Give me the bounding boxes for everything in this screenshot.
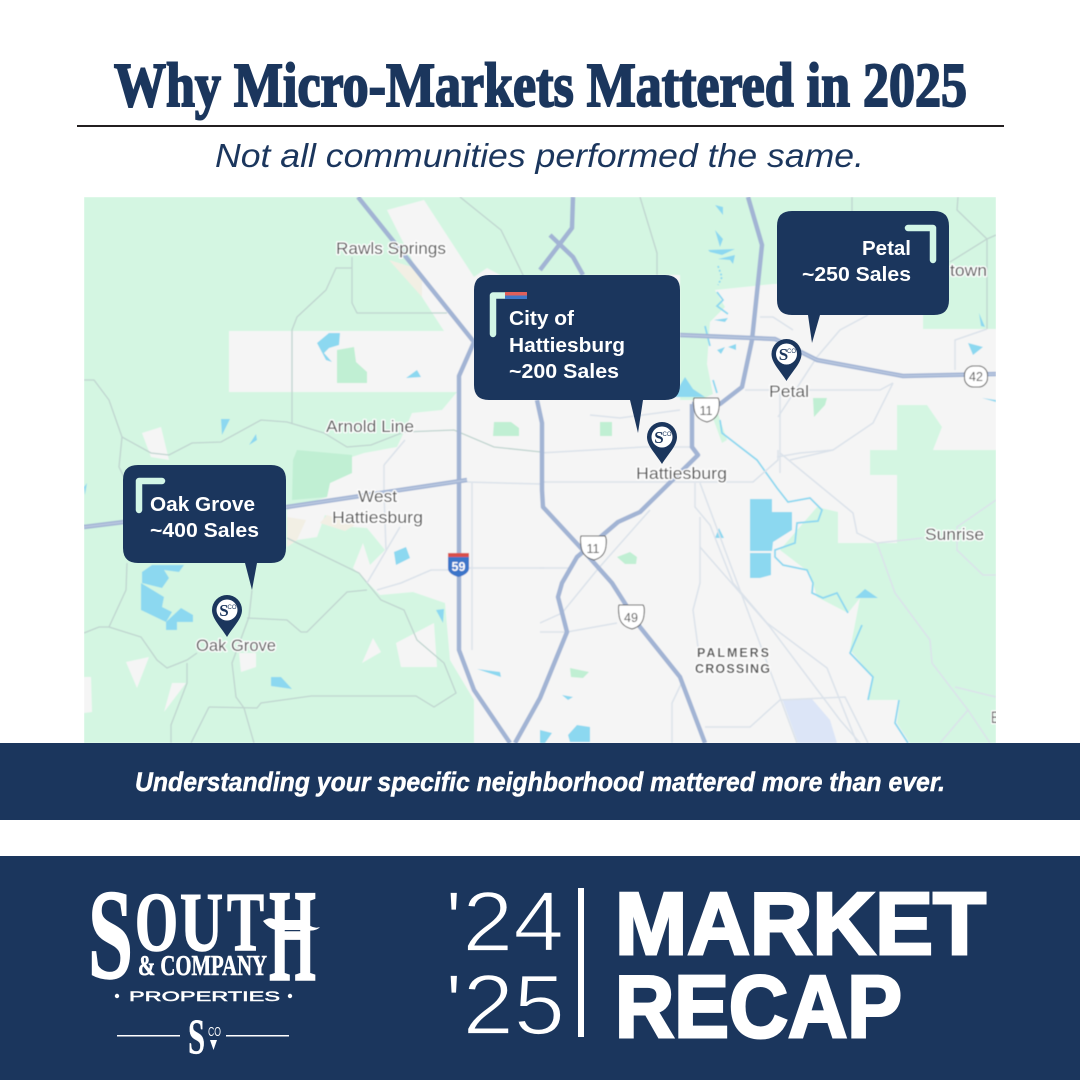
map lake	[782, 699, 837, 743]
map place labels: Oak Grove	[196, 637, 276, 655]
map land: beige and dark green patches	[287, 260, 827, 678]
map place labels: Petal	[769, 383, 809, 401]
map minor roads on developed land	[367, 315, 996, 743]
icon: Oak Grove map pin: S	[219, 601, 229, 620]
icon: Petal map pin: CO	[787, 349, 796, 355]
shield: interstate 59	[448, 553, 469, 577]
years: '24	[445, 875, 564, 970]
map place labels: Rawls Springs	[336, 240, 446, 258]
callout: City of Hattiesburg: ~200 Sales	[509, 361, 619, 383]
shield: US 11 north: 11	[700, 404, 713, 418]
footer: H	[269, 862, 316, 1009]
market recap wordmark: MARKET	[615, 874, 986, 973]
map highway centre lines	[84, 335, 996, 527]
icon: Oak Grove map pin: CO	[228, 605, 237, 611]
highway shields	[448, 366, 988, 629]
map highways	[84, 197, 996, 743]
icon: Hattiesburg map pin: S	[654, 428, 664, 447]
logo: South and Company Properties: PROPERTIES	[129, 988, 280, 1004]
shield: US 49: 49	[624, 611, 638, 625]
years: '25	[445, 958, 565, 1053]
logo: South and Company Properties: S	[88, 864, 133, 1006]
callout: Petal: Petal	[862, 238, 911, 260]
panel: map	[84, 197, 999, 743]
map place labels: PALMERS	[697, 646, 769, 660]
map place labels: Hattiesburg	[636, 465, 727, 483]
market recap wordmark	[615, 874, 986, 1056]
icon: Petal map pin	[772, 339, 802, 381]
callout: City of Hattiesburg	[474, 275, 680, 433]
subtitle: Not all communities performed the same.	[215, 137, 864, 174]
callout: City of Hattiesburg: Hattiesburg	[509, 335, 625, 357]
shield: US 11 north	[694, 398, 719, 422]
shield: interstate 59: 59	[452, 560, 465, 574]
shield: state 42	[964, 366, 988, 387]
icon: Hattiesburg map pin	[647, 422, 677, 464]
callout: Oak Grove: Oak Grove	[150, 494, 255, 516]
map place labels: Hattiesburg	[332, 509, 423, 527]
years	[445, 875, 565, 1053]
icon: Petal map pin: S	[779, 345, 788, 364]
icon: Oak Grove map pin	[212, 595, 242, 637]
callout: Oak Grove	[123, 465, 286, 590]
logo: South and Company Properties: U	[180, 876, 223, 969]
logo: South and Company Properties: & COMPANY	[138, 951, 267, 982]
map minor roads	[84, 197, 996, 743]
logo: South and Company Properties: CO	[208, 1024, 221, 1039]
banner: Understanding your specific neighborhood mattered more than ever.	[135, 767, 945, 797]
map rivers	[705, 266, 908, 743]
icon: Hattiesburg map pin: CO	[662, 432, 672, 438]
logo: South and Company Properties: O	[135, 876, 178, 969]
callout: Petal: ~250 Sales	[802, 264, 911, 286]
map land: green strip by river	[680, 270, 727, 443]
banner	[0, 743, 1080, 820]
callout: Petal	[777, 211, 949, 343]
shield: US 11 south	[580, 536, 606, 560]
market recap wordmark: RECAP	[615, 957, 902, 1056]
map place labels: West	[358, 488, 397, 506]
shield: US 49	[618, 605, 644, 629]
map place labels: Arnold Line	[326, 418, 414, 436]
callout: Oak Grove: ~400 Sales	[150, 520, 259, 542]
logo: South and Company Properties: S	[188, 1008, 205, 1064]
map land: developed areas	[84, 200, 996, 743]
map place labels: town	[950, 262, 987, 280]
map place labels: E	[991, 709, 999, 727]
map water	[84, 205, 996, 743]
map place labels: Sunrise	[925, 526, 984, 544]
footer	[0, 856, 1080, 1080]
map place labels	[196, 240, 999, 727]
logo: South and Company Properties: T	[227, 876, 264, 969]
shield: US 11 south: 11	[587, 542, 600, 556]
callout: City of Hattiesburg: City of	[509, 308, 574, 330]
map place labels: CROSSING	[695, 662, 770, 676]
shield: state 42: 42	[969, 370, 983, 384]
logo: South and Company Properties	[88, 862, 320, 1064]
